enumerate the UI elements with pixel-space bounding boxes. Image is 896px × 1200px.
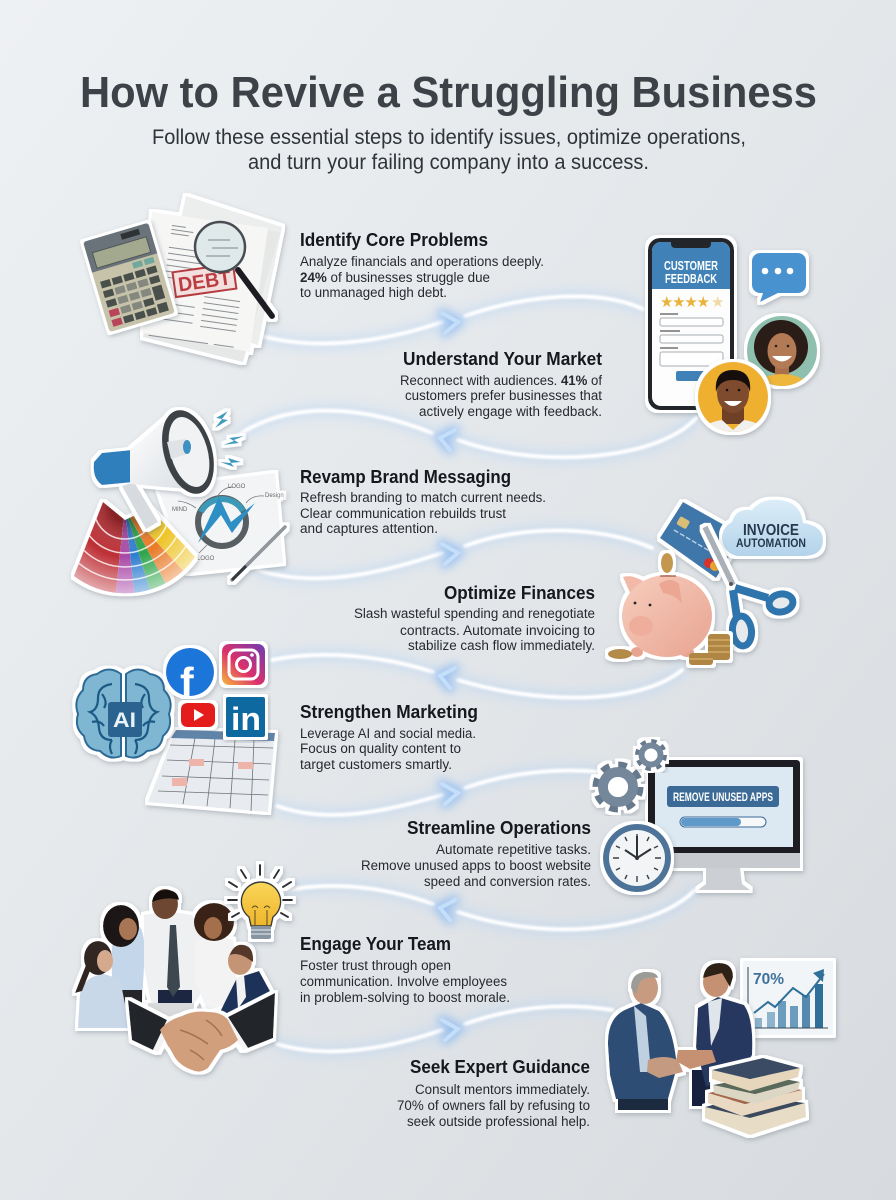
body text: Leverage AI and social media. [300,726,476,741]
icon: ai brain [76,670,171,758]
body text: communication. Involve employees [300,974,507,989]
panel: step 8 seek expert guidance [397,961,833,1135]
title: How to Revive a Struggling Business [80,68,817,117]
icon: chat bubble [752,253,806,302]
body text: Remove unused apps to boost website [361,858,591,873]
panel: step 2 understand your market [400,238,817,435]
connector: step 5 to step 6 [277,771,600,815]
illustration: calculator [83,223,175,332]
illustration: piggy bank and coins [608,553,730,665]
illustration: content calendar [148,730,275,812]
panel: step 6 streamline operations [361,742,800,892]
illustration: logo sketch sheet and pen: Design [265,493,284,499]
glowing connector ribbons [240,296,697,1051]
panel: step 4 optimize finances [354,500,823,665]
illustration: logo sketch sheet and pen [158,473,285,580]
panel: step 3 revamp brand messaging [53,404,546,600]
body text: seek outside professional help. [407,1114,590,1129]
icon: facebook: f [180,659,194,705]
panel: step 7 engage your team [75,865,510,1072]
heading: Identify Core Problems [300,230,488,250]
avatar: smiling man [698,362,768,435]
body text [397,1082,590,1129]
icon: handshake [128,993,275,1072]
connector: step 2 to step 3 [240,411,697,457]
connector: step 4 to step 5 [272,655,682,698]
body text: speed and conversion rates. [424,874,591,889]
body text: and captures attention. [300,521,438,536]
connector: step 1 to step 2 [262,296,643,343]
subtitle: and turn your failing company into a success. [248,151,649,174]
body text: Refresh branding to match current needs. [300,490,546,505]
body text: actively engage with feedback. [419,404,602,419]
icon: facebook [166,648,214,705]
connector: step 3 to step 4 [258,530,652,578]
body text: contracts. Automate invoicing to [400,623,595,638]
illustration: logo sketch sheet and pen: LOGO [228,484,246,490]
body text [400,373,602,419]
illustration: two business advisors [608,963,752,1110]
body text: Foster trust through open [300,958,451,973]
illustration: growth chart: 70% [753,971,784,988]
body text: Slash wasteful spending and renegotiate [354,606,595,621]
heading: Strengthen Marketing [300,702,478,722]
body text [300,958,510,1005]
heading: Optimize Finances [444,583,595,603]
connector: step 6 to step 7 [272,886,695,929]
body text [361,842,591,889]
body text [300,726,476,772]
body text: Clear communication rebuilds trust [300,506,506,521]
illustration: megaphone [94,404,223,529]
icon: sound bolts [215,411,244,467]
heading: Revamp Brand Messaging [300,467,511,487]
body text: 24% of businesses struggle due [300,270,490,285]
illustration: team around table [75,889,271,1028]
illustration: customer feedback phone [648,238,734,410]
subtitle [152,126,746,174]
body text: Consult mentors immediately. [415,1082,590,1097]
body text: customers prefer businesses that [405,388,602,403]
icon: linkedin: in [231,701,261,737]
illustration: customer feedback phone: CUSTOMER [664,258,718,273]
icon: youtube [181,703,215,727]
body text: Automate repetitive tasks. [436,842,591,857]
body text: stabilize cash flow immediately. [408,638,595,653]
stamp: debt: DEBT [177,267,232,297]
heading: Understand Your Market [403,349,602,369]
panel: step 5 strengthen marketing [76,644,478,812]
illustration: colour swatch fan [70,499,201,600]
body text: Focus on quality content to [300,741,461,756]
avatar: smiling woman [747,316,817,410]
illustration: stack of books [705,1058,806,1135]
illustration: growth chart [743,961,833,1035]
body text: 70% of owners fall by refusing to [397,1098,590,1113]
illustration: monitor: REMOVE UNUSED APPS [673,792,773,804]
illustration: logo sketch sheet and pen: LOGO [197,556,215,562]
subtitle: Follow these essential steps to identify issues, optimize operations, [152,126,746,149]
illustration: customer feedback phone: ★★★★ [660,294,710,311]
icon: clock [603,824,671,892]
illustration: customer feedback phone: ★ [711,294,724,311]
body text [300,490,546,536]
icon: light bulb [228,865,292,939]
icon: large gear [596,765,640,809]
heading: Engage Your Team [300,934,451,954]
icon: small gear [638,742,664,768]
icon: linkedin [226,697,265,737]
heading: Seek Expert Guidance [410,1057,590,1077]
body text [354,606,595,653]
body text: Reconnect with audiences. 41% of [400,373,602,388]
illustration: customer feedback phone: FEEDBACK [665,271,717,286]
body text [300,254,544,300]
illustration: documents and magnifier [143,196,282,362]
heading: Streamline Operations [407,818,591,838]
icon: ai brain: AI [113,709,136,732]
body text: in problem-solving to boost morale. [300,990,510,1005]
icon: instagram [222,644,265,685]
panel: step 1 identify core problems [83,196,544,362]
connector: step 7 to step 8 [277,1006,612,1051]
body text: Analyze financials and operations deeply. [300,254,544,269]
illustration: invoice automation cloud: INVOICE [743,522,799,539]
illustration: invoice automation cloud: AUTOMATION [736,536,806,550]
illustration: invoice automation cloud [722,500,823,556]
illustration: scissors [705,527,794,647]
illustration: logo sketch sheet and pen: MIND [172,507,188,513]
illustration: monitor [648,760,800,890]
body text: target customers smartly. [300,757,452,772]
illustration: credit card [660,502,742,578]
body text: to unmanaged high debt. [300,285,447,300]
